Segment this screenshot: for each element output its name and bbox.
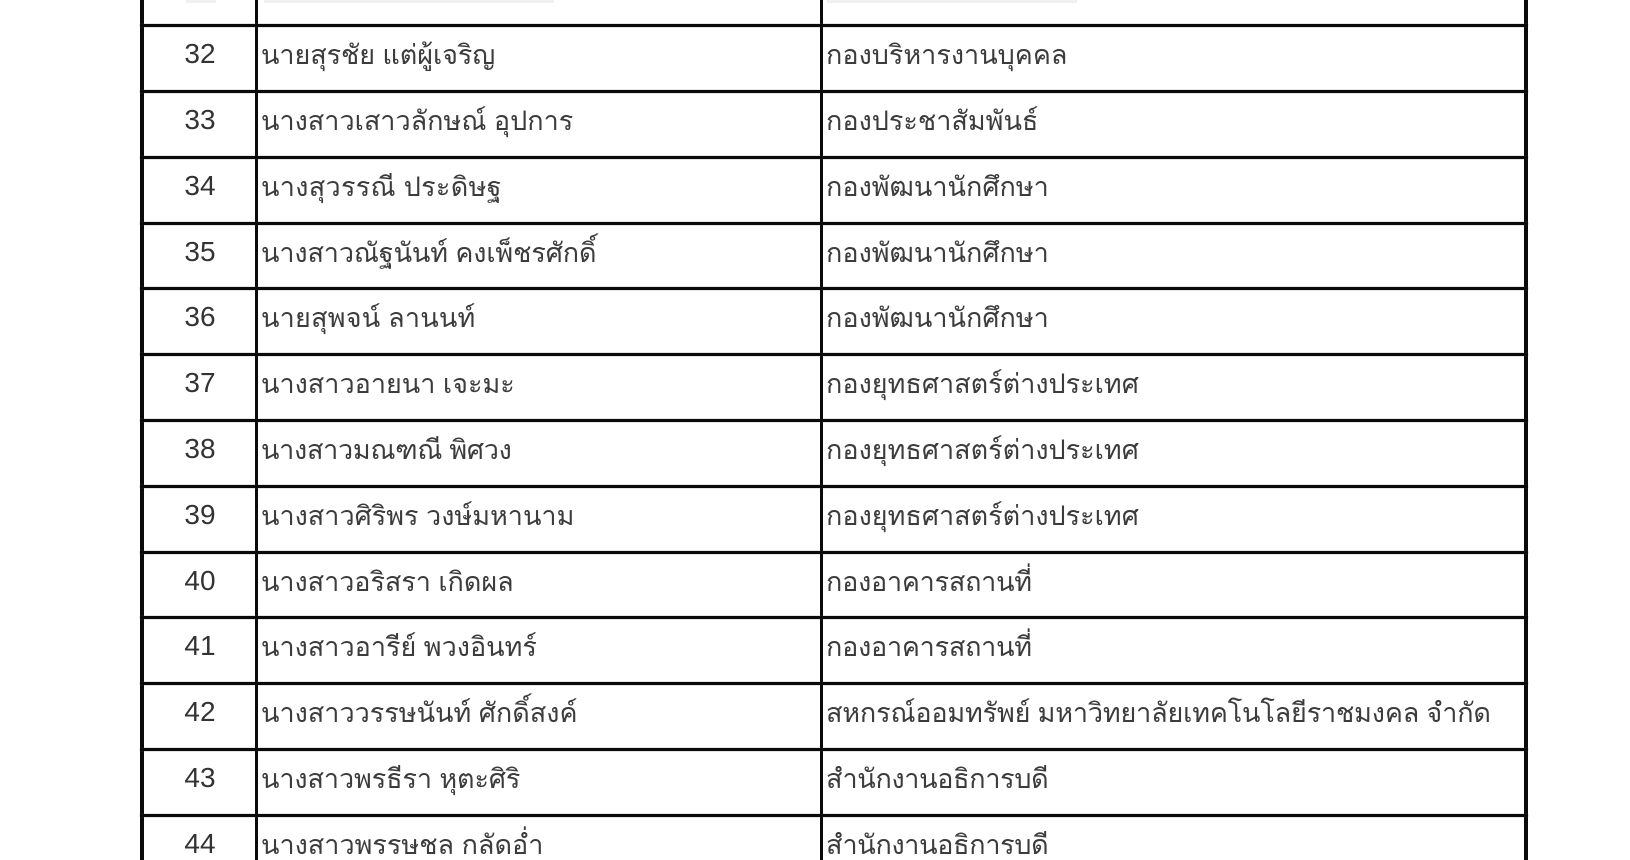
row 38: กองยุทธศาสตร์ต่างประเทศ bbox=[826, 435, 1139, 465]
row 39: 39 bbox=[184, 499, 216, 530]
row 35: กองพัฒนานักศึกษา bbox=[826, 238, 1049, 268]
row 33: 33 bbox=[184, 104, 216, 135]
row 39 bbox=[184, 499, 1139, 532]
row 41 bbox=[184, 628, 1032, 662]
row 43: 43 bbox=[184, 762, 216, 793]
row 32: 32 bbox=[184, 38, 216, 69]
row 33: นางสาวเสาวลักษณ์ อุปการ bbox=[261, 106, 573, 136]
row 40: นางสาวอริสรา เกิดผล bbox=[261, 567, 514, 597]
row 38 bbox=[184, 433, 1139, 466]
row 36: นายสุพจน์ ลานนท์ bbox=[261, 303, 476, 333]
row 34: กองพัฒนานักศึกษา bbox=[826, 172, 1049, 202]
row 37: นางสาวอายนา เจะมะ bbox=[261, 369, 515, 399]
row 44: สำนักงานอธิการบดี bbox=[826, 830, 1048, 860]
row 43: นางสาวพรธีรา หุตะศิริ bbox=[261, 764, 520, 794]
row 32 bbox=[184, 38, 1067, 72]
row 43: สำนักงานอธิการบดี bbox=[826, 764, 1048, 794]
row 37: กองยุทธศาสตร์ต่างประเทศ bbox=[826, 369, 1139, 399]
row 38: 38 bbox=[184, 433, 216, 464]
row 39: กองยุทธศาสตร์ต่างประเทศ bbox=[826, 501, 1139, 531]
row 42: 42 bbox=[184, 696, 216, 727]
row 40: 40 bbox=[184, 565, 216, 596]
row 32: กองบริหารงานบุคคล bbox=[826, 40, 1067, 70]
row 36 bbox=[184, 301, 1049, 334]
row 40 bbox=[184, 563, 1032, 597]
row 35 bbox=[184, 233, 1049, 269]
row 44: นางสาวพรรษชล กลัดอ่ำ bbox=[261, 830, 543, 860]
row 42: สหกรณ์ออมทรัพย์ มหาวิทยาลัยเทคโนโลยีราชมงคล จำกัด bbox=[826, 698, 1491, 728]
row 34: นางสุวรรณี ประดิษฐ bbox=[261, 172, 502, 202]
row 43 bbox=[184, 762, 1048, 796]
row 35: นางสาวณัฐนันท์ คงเพ็ชรศักดิ์ bbox=[261, 238, 596, 268]
row 37 bbox=[184, 367, 1139, 400]
row 33: กองประชาสัมพันธ์ bbox=[826, 106, 1038, 136]
row 32: นายสุรชัย แต่ผู้เจริญ bbox=[261, 40, 495, 70]
row 39: นางสาวศิริพร วงษ์มหานาม bbox=[261, 501, 574, 531]
row 38: นางสาวมณฑณี พิศวง bbox=[261, 435, 512, 465]
row 41: นางสาวอารีย์ พวงอินทร์ bbox=[261, 632, 537, 662]
row 41: กองอาคารสถานที่ bbox=[826, 632, 1032, 662]
row 36: 36 bbox=[184, 301, 216, 332]
row 34: 34 bbox=[184, 170, 216, 201]
row 44: 44 bbox=[184, 828, 216, 859]
row 42 bbox=[184, 693, 1491, 728]
row 44 bbox=[184, 826, 1048, 860]
row 37: 37 bbox=[184, 367, 216, 398]
row 42: นางสาววรรษนันท์ ศักดิ์สงค์ bbox=[261, 698, 578, 728]
row 40: กองอาคารสถานที่ bbox=[826, 567, 1032, 597]
row 34 bbox=[184, 170, 1049, 204]
clipped row above 32 bbox=[186, 0, 1077, 3]
row 41: 41 bbox=[184, 630, 216, 661]
row 36: กองพัฒนานักศึกษา bbox=[826, 303, 1049, 333]
row 35: 35 bbox=[184, 236, 216, 267]
row 33 bbox=[184, 104, 1038, 138]
